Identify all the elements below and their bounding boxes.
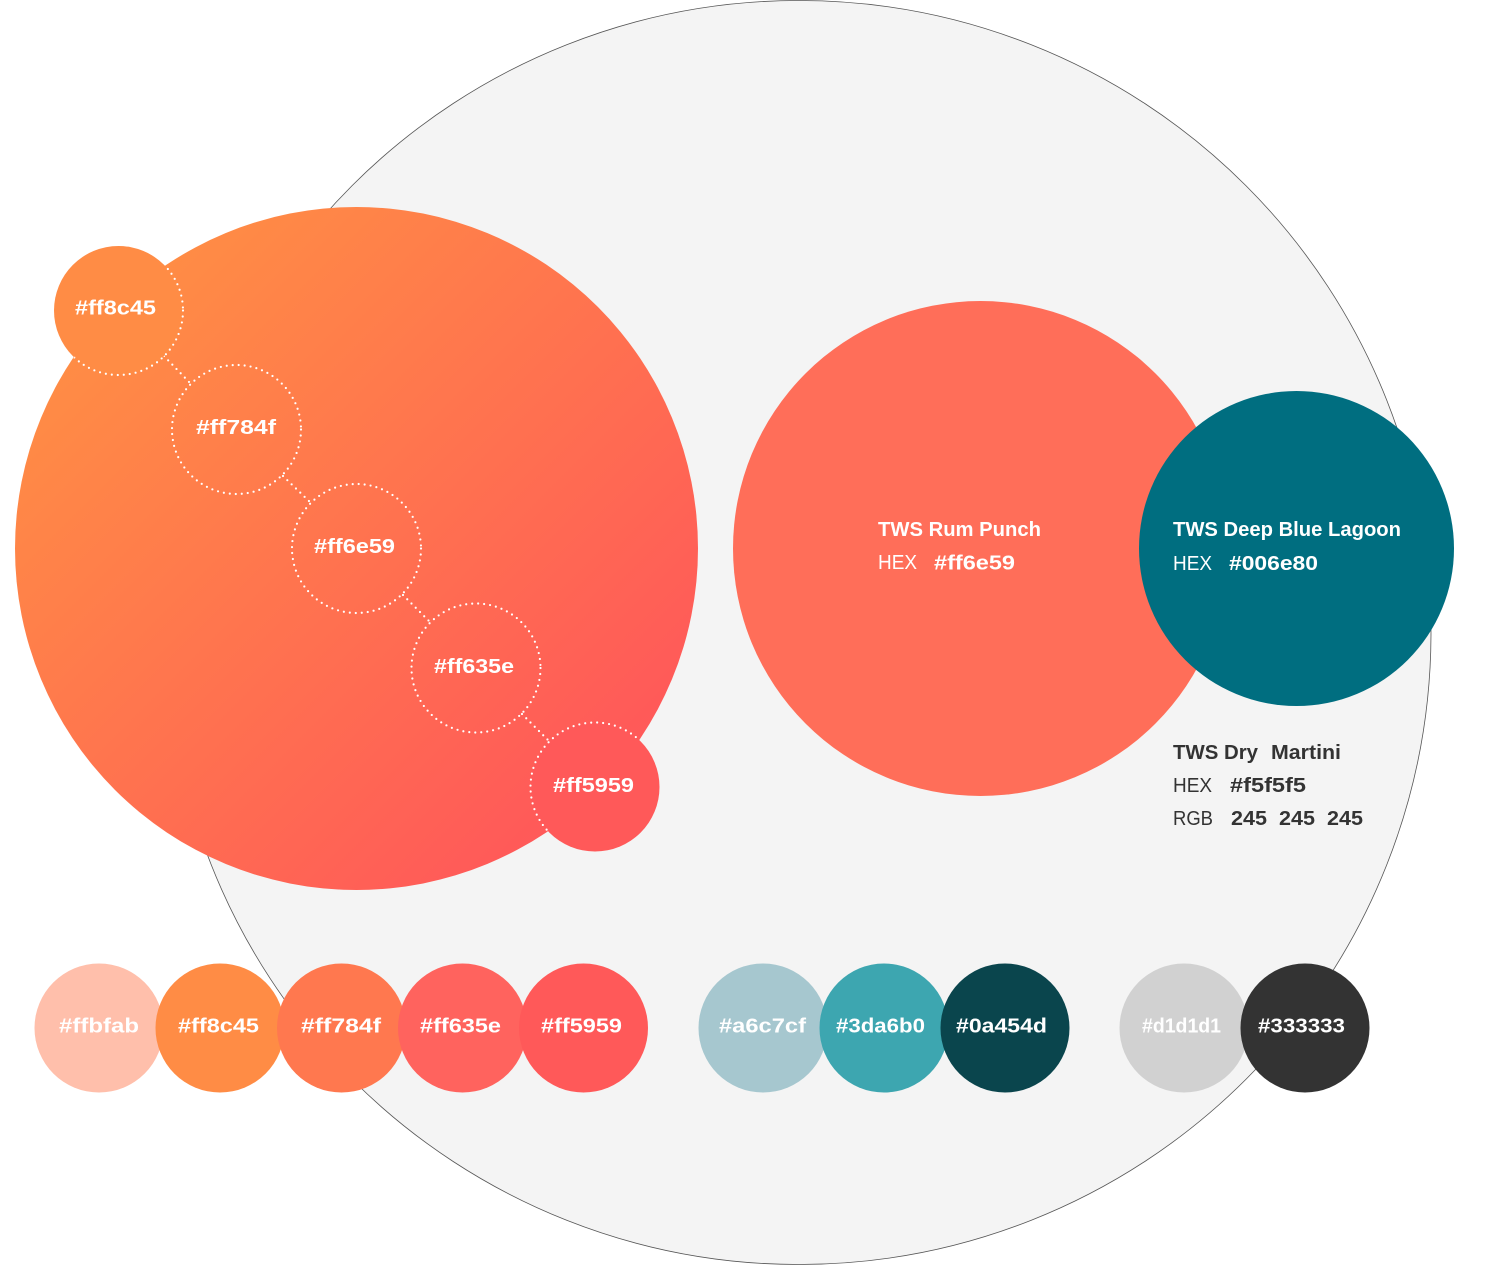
swatch: #d1d1d1: #d1d1d1 — [1142, 1016, 1221, 1038]
text: TWS Dry Martini: Martini — [1271, 742, 1341, 764]
text: TWS Deep Blue Lagoon: TWS Deep Blue Lagoon — [1173, 519, 1401, 541]
gradient stop: #ff8c45 — [54, 246, 183, 375]
circle: TWS Deep Blue Lagoon — [1139, 391, 1454, 706]
text: TWS Dry Martini: 245 — [1231, 808, 1267, 830]
swatch: #3da6b0: #3da6b0 — [836, 1016, 925, 1038]
swatch: #d1d1d1 — [1120, 964, 1248, 1092]
gradient stop: #ff784f: #ff784f — [196, 417, 276, 439]
gradient stop: #ff8c45: #ff8c45 — [75, 298, 156, 320]
swatch: #0a454d: #0a454d — [956, 1016, 1047, 1038]
gradient circle — [15, 207, 698, 890]
swatch: #ff784f — [277, 964, 406, 1092]
gradient panel — [15, 207, 698, 890]
swatch: #ffbfab — [34, 964, 164, 1092]
circle: TWS Rum Punch — [733, 301, 1228, 796]
swatch: #333333 — [1240, 964, 1370, 1092]
swatch: #a6c7cf: #a6c7cf — [719, 1016, 806, 1038]
text: TWS Deep Blue Lagoon: #006e80 — [1229, 553, 1318, 575]
swatch: #0a454d — [940, 964, 1070, 1092]
swatch row: blue colours — [698, 964, 1070, 1092]
text: TWS Dry Martini — [1173, 742, 1363, 830]
swatch: #ff8c45 — [156, 964, 284, 1092]
swatch: #ff5959: #ff5959 — [541, 1016, 622, 1038]
text: TWS Dry Martini: RGB — [1173, 808, 1213, 830]
swatch: #ff635e: #ff635e — [420, 1016, 501, 1038]
swatch: #ff635e — [398, 964, 527, 1092]
connector lines — [164, 356, 549, 741]
text: TWS Dry Martini: HEX — [1173, 775, 1212, 797]
gradient stop: #ff6e59: #ff6e59 — [314, 536, 395, 558]
gradient stop: #ff5959: #ff5959 — [553, 775, 634, 797]
gradient stop: #ff784f — [172, 365, 301, 494]
swatch: #ff784f: #ff784f — [301, 1016, 381, 1038]
text: TWS Dry Martini: #f5f5f5 — [1230, 775, 1306, 797]
text: TWS Rum Punch — [878, 519, 1041, 574]
text: TWS Dry Martini: TWS Dry — [1173, 742, 1259, 764]
swatch: #333333: #333333 — [1258, 1016, 1345, 1038]
text: TWS Dry Martini: 245 — [1279, 808, 1315, 830]
swatch row: neutral colours — [1120, 964, 1370, 1092]
text: TWS Deep Blue Lagoon — [1173, 519, 1401, 575]
text: TWS Dry Martini: 245 — [1327, 808, 1363, 830]
swatch row: warm colours — [34, 964, 648, 1092]
gradient stop: #ff6e59 — [292, 484, 421, 613]
swatch: #ff8c45: #ff8c45 — [178, 1016, 259, 1038]
swatch: #3da6b0 — [820, 964, 948, 1092]
text: TWS Rum Punch: HEX — [878, 552, 917, 574]
gradient stop: #ff5959 — [530, 722, 660, 852]
swatch: #ff5959 — [519, 964, 648, 1092]
text: TWS Rum Punch: TWS Rum Punch — [878, 519, 1041, 541]
gradient stop: #ff635e — [412, 604, 540, 732]
text: TWS Deep Blue Lagoon: HEX — [1173, 553, 1212, 575]
gradient stop: #ff635e: #ff635e — [434, 656, 514, 678]
text: TWS Rum Punch: #ff6e59 — [934, 552, 1015, 574]
swatch: #ffbfab: #ffbfab — [59, 1016, 139, 1038]
swatch: #a6c7cf — [698, 964, 828, 1092]
